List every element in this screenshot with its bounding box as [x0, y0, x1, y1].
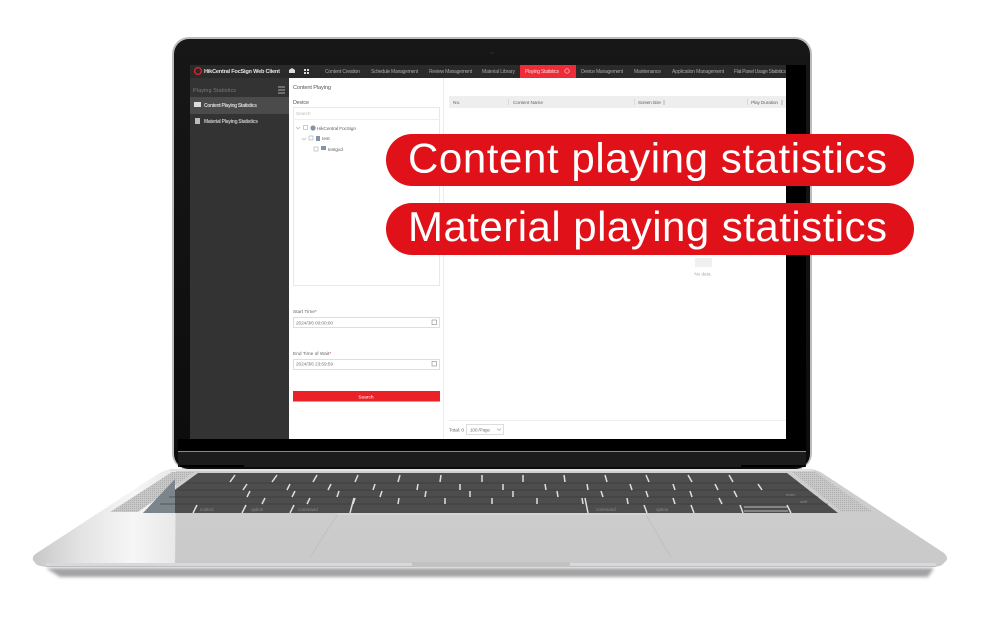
- key labels: command: [596, 507, 616, 512]
- nav items: Maintenance: [634, 69, 661, 75]
- table header: [449, 96, 786, 108]
- end time field: End Time of Wait*: [293, 351, 331, 357]
- nav items: Device Management: [581, 69, 624, 75]
- sidebar: [190, 78, 289, 439]
- device panel: Device: [293, 100, 309, 106]
- divider: [443, 78, 444, 439]
- logo icon: [195, 68, 201, 74]
- callout: content playing statistics: Content playing statistics: [408, 134, 887, 182]
- menu item: material playing: Material Playing Statistics: [204, 119, 258, 125]
- key labels: shift: [800, 499, 808, 504]
- nav items: Review Management: [429, 69, 473, 75]
- app title: HikCentral FocSign Web Client: [204, 69, 280, 75]
- device tree box: HikCentral FocSign: [317, 126, 356, 132]
- key labels: option: [251, 507, 264, 512]
- device panel: Content Playing: [293, 85, 331, 91]
- laptop lid: [172, 37, 812, 470]
- end time field: 2024/3/6 23:59:59: [296, 362, 333, 368]
- home icon: [289, 68, 295, 73]
- key labels: enter: [786, 492, 796, 497]
- device tree box: Search: [296, 111, 311, 116]
- nav items: Schedule Management: [371, 69, 419, 75]
- device tree box: [293, 108, 440, 286]
- results table: [449, 96, 786, 434]
- nav items: Content Creation: [325, 69, 360, 75]
- key labels: [200, 492, 808, 512]
- menu item: content playing: [190, 97, 289, 114]
- key labels: option: [656, 507, 669, 512]
- search button: Search: [358, 394, 374, 400]
- device tree box: testgxd: [328, 147, 343, 153]
- table header: Play Duration: [751, 100, 778, 106]
- keyboard: [143, 473, 838, 513]
- start time field: Start Time*: [293, 309, 317, 315]
- pagination: Total: 0: [449, 428, 464, 434]
- table header: Content Name: [513, 100, 543, 106]
- nav items: Flat Panel Usage Statistics: [734, 69, 786, 75]
- device tree box: test: [322, 136, 330, 142]
- nav items: Material Library: [482, 69, 516, 75]
- trackpad: [310, 514, 671, 557]
- grid icon: [304, 69, 309, 74]
- nav items: Application Management: [672, 69, 725, 75]
- nav items: [325, 69, 786, 75]
- speaker grilles: [110, 472, 873, 512]
- active tab: [520, 65, 576, 78]
- start time field: 2024/3/6 00:00:00: [296, 320, 333, 326]
- table header: Screen Size: [638, 100, 661, 106]
- start time field: [293, 309, 440, 328]
- sidebar: Playing Statistics: [193, 88, 236, 94]
- key labels: command: [298, 507, 318, 512]
- collapse icon: [278, 87, 285, 93]
- pagination: [449, 420, 786, 434]
- active tab: Playing Statistics: [525, 69, 560, 75]
- device panel: [293, 85, 440, 402]
- key labels: control: [200, 507, 214, 512]
- menu item: content playing: Content Playing Statistics: [204, 103, 257, 109]
- laptop shadow: [46, 568, 934, 577]
- search button: [293, 391, 440, 402]
- app screen: [190, 65, 786, 439]
- pagination: 100 /Page: [470, 428, 490, 434]
- end time field: [293, 351, 440, 370]
- laptop base: [33, 469, 947, 567]
- callout: material playing statistics: Material playing statistics: [408, 203, 887, 250]
- table header: No.: [453, 100, 460, 106]
- empty state: [694, 258, 712, 276]
- top navigation bar: [190, 65, 786, 78]
- empty state: No data.: [694, 272, 712, 276]
